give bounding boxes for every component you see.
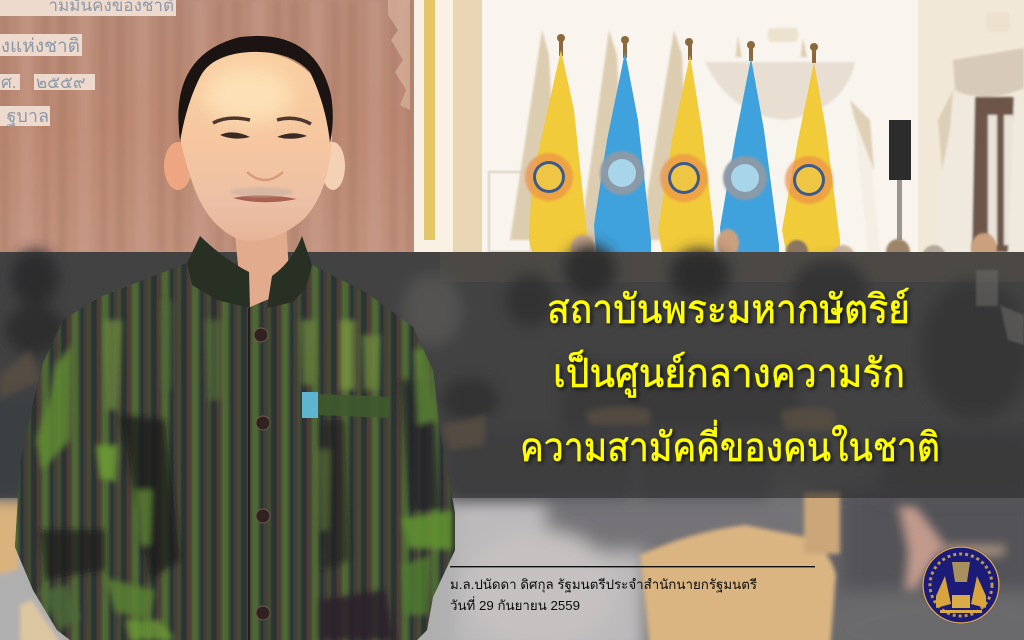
jacket body: [0, 250, 470, 640]
caption: [450, 577, 757, 613]
curtain banner labels: ๒๕๕๙: [36, 73, 85, 92]
headline: เป็นศูนย์กลางความรัก: [553, 349, 905, 397]
headline: สถาบันพระมหากษัตริย์: [547, 287, 910, 332]
curtain banner labels: ศ.: [1, 73, 17, 92]
caption: ม.ล.ปนัดดา ดิศกุล รัฐมนตรีประจำสำนักนายกรัฐมนตรี: [450, 577, 757, 593]
breast pocket: [319, 394, 390, 418]
caption: วันที่ 29 กันยายน 2559: [450, 596, 580, 613]
headline: ความสามัคคี่ของคนในชาติ: [520, 420, 940, 470]
dark translucent band: [0, 252, 1024, 498]
flag: yellow 3: [782, 43, 840, 252]
draped curtain behind flags: [700, 57, 880, 252]
facial features: [213, 118, 311, 202]
flag: blue 2: [720, 41, 779, 252]
background: wall and gold pillar: [414, 0, 1024, 252]
flag: blue 1: [594, 36, 651, 252]
flag row: [525, 34, 840, 252]
face and neck: [164, 50, 345, 308]
wall sconces: [768, 12, 1010, 42]
icon: government seal: [922, 546, 1000, 624]
lapel pin badge: [302, 392, 318, 418]
loudspeaker on stand: [889, 120, 911, 240]
curtain banner labels: งแห่งชาติ: [1, 36, 80, 57]
jacket buttons: [254, 328, 270, 620]
seated dignitaries: [571, 229, 997, 271]
background: curtain stage: [0, 0, 414, 252]
flag shadows on wall: [510, 30, 815, 240]
flag: yellow 2: [658, 38, 714, 252]
curtain banner labels: ฐบาล: [6, 106, 49, 127]
headline: [520, 287, 940, 470]
right window drape and door: [937, 48, 1024, 252]
mandarin collar: [187, 236, 312, 308]
blurred audience (lower background): [0, 244, 1024, 640]
placket: [248, 308, 250, 640]
curtain banner labels: [0, 0, 176, 127]
flag: yellow 1: [525, 34, 587, 252]
caption divider: [450, 566, 815, 567]
portrait: man in green silk jacket: [0, 36, 470, 640]
hair: [178, 36, 333, 143]
